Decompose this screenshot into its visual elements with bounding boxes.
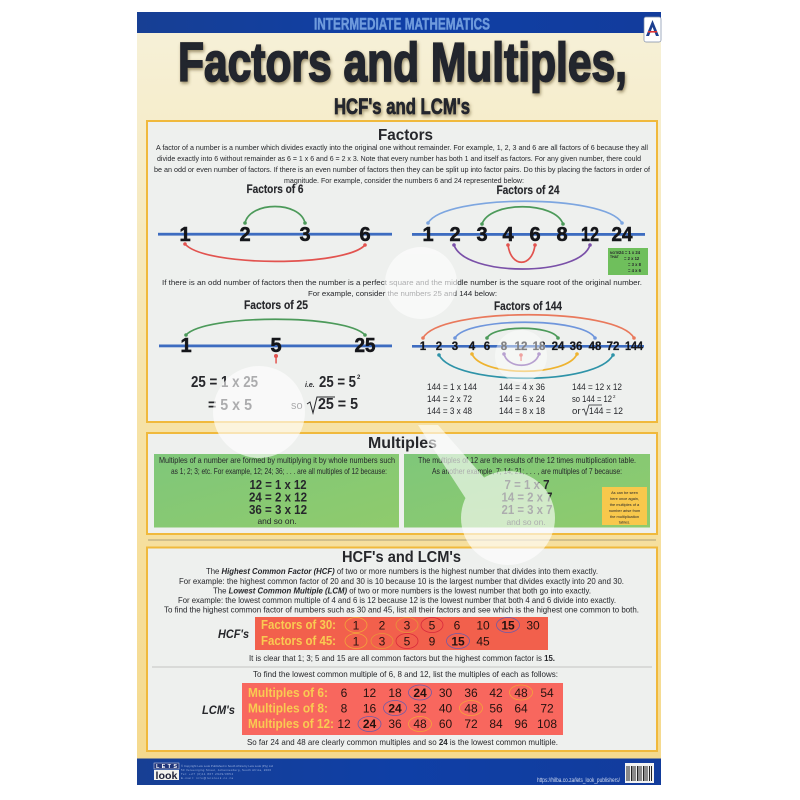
table: HCF factor lists: 10 bbox=[476, 618, 490, 632]
text block: 144 factor pairs: 2 bbox=[613, 394, 616, 399]
text block: copyright: 50 Vereeniging Street, Johannesburg, South Africa, 2000 bbox=[181, 768, 271, 772]
callout: multiplication tables note: number arise from bbox=[609, 508, 640, 513]
text block: 144 factor pairs bbox=[427, 382, 623, 417]
chart: factors of 24: 3 bbox=[476, 224, 488, 246]
table: HCF factor lists: 30 bbox=[526, 618, 540, 632]
callout: multiplication tables note: As can be seen bbox=[611, 490, 638, 495]
chart: factors of 24: 2 bbox=[449, 224, 461, 246]
panel: multiples of 7: As another example, 7; 14; 21; . . . , are multiples of 7 because: bbox=[432, 466, 622, 476]
panel: multiples of 7: and so on. bbox=[506, 517, 546, 527]
chart: factors of 144: 8 bbox=[501, 341, 508, 353]
text block: 144 factor pairs: 144 = 12 bbox=[589, 406, 623, 417]
callout: note on 24: = 2 x 12 bbox=[624, 256, 640, 261]
chart: factors of 25: 1 bbox=[180, 335, 192, 357]
chart: factors of 25: 25 bbox=[354, 335, 376, 357]
table: HCF factor lists: 1 bbox=[353, 618, 360, 632]
heading: multiples: Multiples bbox=[368, 435, 437, 452]
chart: factors of 24: 24 bbox=[612, 224, 633, 246]
text block: copyright: © Copyright Lets Look Published in South Africa by Lets Look (Pty) Ltd bbox=[181, 764, 273, 768]
table: LCM multiple lists: 8 bbox=[341, 702, 348, 716]
text block: LCM conclusion: So far 24 and 48 are clearly common multiples and so 24 is the lowest common multiple. bbox=[247, 738, 558, 747]
panel: multiples of 12 bbox=[154, 454, 399, 528]
text block: definitions: For example: the lowest common multiple of 4 and 6 is 12 because 12 is the lowest number that both 4 and 6 divide into exactly. bbox=[178, 596, 616, 605]
table: LCM multiple lists: 48 bbox=[413, 717, 427, 731]
callout: note on 24: THAT bbox=[610, 255, 620, 259]
chart: factors of 24: Factors of 24 bbox=[496, 185, 560, 197]
callout: note on 24: = 3 x 8 bbox=[628, 262, 642, 267]
text block: 25 equations: 2 bbox=[357, 375, 361, 381]
table: HCF factor lists: 3 bbox=[404, 618, 411, 632]
text block: definitions: To find the highest common factor of numbers such as 30 and 45, list all their factors and see which is the highest one common to both. bbox=[164, 606, 639, 614]
callout: multiplication tables note: the multiples of a bbox=[610, 502, 640, 507]
chart: factors of 144: 6 bbox=[484, 341, 490, 353]
text block: 25 equations: i.e. bbox=[305, 382, 315, 389]
table: HCF factor lists: 45 bbox=[476, 634, 490, 648]
text block: HCF conclusion: It is clear that 1; 3; 5 and 15 are all common factors but the highest common factor is 15. bbox=[249, 654, 555, 663]
panel: HCF's and LCM's bbox=[147, 548, 657, 751]
chart: factors of 25 bbox=[159, 300, 392, 364]
text block: 144 factor pairs: 144 = 1 x 144 bbox=[427, 382, 478, 393]
white glare reflections bbox=[213, 247, 555, 565]
text block: 25 equations: 25 = 5 bbox=[319, 374, 356, 391]
text block: 144 factor pairs: 144 = 8 x 18 bbox=[499, 406, 545, 417]
table: LCM multiple lists: 48 bbox=[464, 702, 478, 716]
text block: 25 equations: 25 = 5 bbox=[318, 396, 358, 413]
chart: factors of 24: 4 bbox=[502, 224, 514, 246]
text block: definitions: For example: the highest common factor of 20 and 30 is 10 because 10 is the largest number that divides exactly into 20 and 30. bbox=[179, 577, 624, 586]
table: HCF factor lists: 1 bbox=[353, 634, 360, 648]
table: LCM multiple lists: 108 bbox=[537, 717, 557, 731]
chart: factors of 25: 5 bbox=[270, 335, 282, 357]
label: HCF's: HCF's bbox=[218, 627, 249, 641]
chart: factors of 25: Factors of 25 bbox=[244, 300, 309, 312]
table: LCM multiple lists: 24 bbox=[388, 702, 402, 716]
heading: factors: Factors bbox=[378, 127, 433, 144]
table: LCM multiple lists: 60 bbox=[439, 717, 452, 731]
table: HCF factor lists: 3 bbox=[379, 634, 386, 648]
table: LCM multiple lists: 72 bbox=[464, 717, 478, 731]
chart: factors of 144: 24 bbox=[552, 341, 565, 353]
table: LCM multiple lists: 32 bbox=[413, 702, 427, 716]
table: HCF factor lists: 2 bbox=[379, 618, 386, 632]
text block: definitions: The Highest Common Factor (HCF) of two or more numbers is the highest number that divides into them exactly. bbox=[206, 567, 598, 576]
chart: factors of 144: 36 bbox=[570, 341, 582, 353]
icon: publisher logo bbox=[644, 17, 661, 42]
text block: 144 factor pairs: 144 = 6 x 24 bbox=[499, 394, 546, 405]
text block: 144 factor pairs: 144 = 4 x 36 bbox=[499, 382, 545, 393]
chart: factors of 144: 1 bbox=[420, 341, 427, 353]
table: HCF factor lists: 15 bbox=[451, 634, 465, 648]
chart: factors of 144: 48 bbox=[589, 341, 602, 353]
table: LCM multiple lists: 24 bbox=[413, 686, 427, 700]
icon: LETS look logo bbox=[154, 763, 179, 782]
callout: multiplication tables note: here once again, bbox=[610, 496, 639, 501]
table: LCM multiple lists: 64 bbox=[514, 702, 528, 716]
label: LCM's: LCM's bbox=[202, 703, 235, 717]
table: LCM multiple lists: 96 bbox=[514, 717, 528, 731]
table: LCM multiple lists: 54 bbox=[540, 686, 554, 700]
chart: factors of 24: 6 bbox=[529, 224, 541, 246]
text block: definitions bbox=[164, 567, 639, 614]
text block: 25 equations: so bbox=[291, 400, 303, 412]
chart: factors of 144 bbox=[412, 301, 644, 378]
chart: factors of 24: 12 bbox=[581, 224, 599, 246]
table: LCM multiple lists: Multiples of 6: bbox=[248, 686, 328, 700]
table: LCM multiple lists: 30 bbox=[439, 686, 452, 700]
text block: copyright bbox=[181, 764, 273, 780]
text block: factor definition: A factor of a number is a number which divides exactly into the original one without remainder. For example, 1, 2, 3 and 6 are all factors of 6 because they all bbox=[156, 143, 648, 152]
panel: multiples of 7: The multiples of 12 are the results of the 12 times multiplication table. bbox=[418, 455, 636, 465]
text block: definitions: The Lowest Common Multiple (LCM) of two or more numbers is the lowest number that both go into exactly. bbox=[213, 586, 591, 596]
panel: multiples of 12: and so on. bbox=[257, 516, 297, 526]
table: LCM multiple lists: 16 bbox=[363, 702, 376, 716]
table: HCF factor lists: 5 bbox=[404, 634, 411, 648]
chart: factors of 144: 72 bbox=[607, 341, 619, 353]
callout: multiplication tables note bbox=[602, 487, 647, 525]
callout: note on 24: 24 = 1 x 24 bbox=[619, 250, 641, 255]
text block: url: https://hilba.co.za/lets_look_publishers/ bbox=[537, 778, 620, 784]
table: LCM multiple lists: 84 bbox=[489, 717, 503, 731]
table: HCF factor lists: 15 bbox=[501, 618, 515, 632]
panel: multiples of 7: 14 = 2 x 7 bbox=[502, 490, 553, 504]
table: LCM multiple lists: 24 bbox=[363, 717, 376, 731]
table: LCM multiple lists: 36 bbox=[464, 686, 478, 700]
callout: note on 24: = 4 x 6 bbox=[628, 268, 642, 273]
icon: middle factor pin bbox=[274, 354, 278, 364]
table: LCM multiple lists: 6 bbox=[341, 686, 348, 700]
poster background bbox=[137, 12, 661, 785]
text block: LCM intro: To find the lowest common multiple of 6, 8 and 12, list the multiples of each as follows: bbox=[253, 670, 558, 679]
table: LCM multiple lists: 56 bbox=[489, 702, 503, 716]
text block: odd number of factors: For example, consider the numbers 25 and 144 below: bbox=[308, 289, 497, 298]
heading: HCF's and LCM's: HCF's and LCM's bbox=[342, 549, 461, 566]
table: HCF factor lists bbox=[255, 617, 548, 650]
text block: odd number of factors bbox=[162, 278, 642, 298]
chart: factors of 24 bbox=[412, 185, 648, 275]
text block: 144 factor pairs: 144 = 12 x 12 bbox=[572, 382, 622, 393]
text block: copyright: E-mail: info@letslook.co.za bbox=[181, 776, 233, 780]
chart: factors of 144: Factors of 144 bbox=[494, 301, 563, 313]
panel: multiples of 12: as 1; 2; 3; etc. For example, 12; 24; 36; . . . are all multiples of 12 because: bbox=[171, 466, 387, 476]
table: HCF factor lists: Factors of 30: bbox=[261, 618, 336, 632]
table: LCM multiple lists: Multiples of 8: bbox=[248, 702, 328, 716]
table: HCF factor lists: Factors of 45: bbox=[261, 634, 336, 648]
chart: factors of 144: 4 bbox=[469, 341, 476, 353]
header band bbox=[137, 12, 661, 34]
table: LCM multiple lists: 72 bbox=[540, 702, 554, 716]
panel: multiples of 7: 7 = 1 x 7 bbox=[504, 478, 550, 492]
chart: factors of 6: 1 bbox=[179, 224, 191, 246]
table: LCM multiple lists: 12 bbox=[363, 686, 376, 700]
chart: factors of 144: 3 bbox=[452, 341, 458, 353]
text block: factor definition bbox=[154, 143, 651, 185]
text block: factor definition: be an odd or even number of factors. If there is an even number of factors then they can be split up into factor pairs. Do this by placing the factors in order of bbox=[154, 165, 651, 174]
table: LCM multiple lists: 40 bbox=[439, 702, 452, 716]
panel: multiples bbox=[147, 433, 657, 534]
text block: 144 factor pairs: 144 = 3 x 48 bbox=[427, 406, 472, 417]
text block: 144 factor pairs: so 144 = 12 bbox=[572, 394, 612, 405]
panel: multiples of 7 bbox=[404, 454, 650, 528]
chart: factors of 6: 6 bbox=[359, 224, 371, 246]
chart: factors of 6: Factors of 6 bbox=[246, 184, 304, 196]
callout: multiplication tables note: tables. bbox=[619, 520, 630, 524]
table: HCF factor lists: 9 bbox=[429, 634, 436, 648]
text block: factor definition: divide exactly into 6 without remainder as 6 = 1 x 6 and 6 = 2 x 3. Note that every number has both 1 and itself as factors. For any given number, there could bbox=[157, 154, 641, 163]
chart: factors of 24: 8 bbox=[556, 224, 568, 246]
footer band bbox=[137, 758, 661, 785]
table: LCM multiple lists: 12 bbox=[337, 717, 351, 731]
callout: multiplication tables note: the multiplication bbox=[610, 514, 639, 519]
callout: note on 24 bbox=[608, 248, 648, 275]
table: LCM multiple lists bbox=[242, 683, 563, 735]
text block: 25 equations bbox=[191, 374, 361, 414]
chart: factors of 144: 144 bbox=[625, 341, 644, 353]
header band: INTERMEDIATE MATHEMATICS bbox=[314, 16, 490, 34]
icon: LETS look logo: look bbox=[156, 770, 178, 782]
chart: factors of 6: 3 bbox=[299, 224, 311, 246]
chart: factors of 6: 2 bbox=[239, 224, 251, 246]
table: LCM multiple lists: 36 bbox=[388, 717, 402, 731]
subtitle: HCF's and LCM's bbox=[334, 94, 470, 119]
panel: multiples of 12: 36 = 3 x 12 bbox=[249, 503, 307, 517]
text block: copyright: Tel: +27 (0)11 867 2929/3854 bbox=[181, 772, 233, 776]
panel: multiples of 12: Multiples of a number are formed by multiplying it by whole numbers such bbox=[159, 455, 395, 465]
panel: factors bbox=[147, 121, 657, 422]
table: LCM multiple lists: 18 bbox=[388, 686, 402, 700]
chart: factors of 144: 18 bbox=[533, 341, 546, 353]
chart: factors of 24: 1 bbox=[422, 224, 434, 246]
chart: factors of 144: 12 bbox=[515, 341, 527, 353]
table: LCM multiple lists: 42 bbox=[489, 686, 503, 700]
icon: LETS look logo: LETS bbox=[156, 764, 177, 770]
panel: multiples of 7: 21 = 3 x 7 bbox=[502, 503, 553, 517]
panel: multiples of 12: 24 = 2 x 12 bbox=[249, 490, 307, 504]
chart: factors of 6 bbox=[158, 184, 392, 261]
text block: factor definition: magnitude. For example, consider the numbers 6 and 24 represented below: bbox=[284, 176, 524, 185]
table: LCM multiple lists: Multiples of 12: bbox=[248, 717, 334, 731]
title: Factors and Multiples, bbox=[178, 31, 627, 93]
icon: barcode bbox=[625, 763, 654, 783]
text block: odd number of factors: If there is an odd number of factors then the number is a perfect square and the middle number is the square root of the original number. bbox=[162, 278, 642, 287]
table: HCF factor lists: 5 bbox=[429, 618, 436, 632]
table: LCM multiple lists: 48 bbox=[514, 686, 528, 700]
table: HCF factor lists: 6 bbox=[454, 618, 461, 632]
panel: multiples of 12: 12 = 1 x 12 bbox=[250, 478, 307, 492]
text block: 144 factor pairs: 144 = 2 x 72 bbox=[427, 394, 472, 405]
text block: 25 equations: = 5 x 5 bbox=[208, 397, 252, 414]
text block: 144 factor pairs: or bbox=[572, 406, 581, 417]
text block: 25 equations: 25 = 1 x 25 bbox=[191, 374, 258, 391]
chart: factors of 144: 2 bbox=[436, 341, 442, 353]
callout: note on 24: NOTE bbox=[610, 251, 620, 255]
